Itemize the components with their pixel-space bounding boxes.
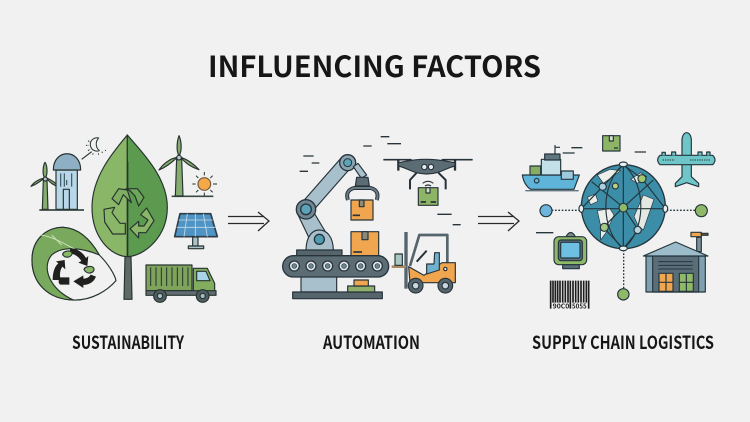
icon: silo tower xyxy=(53,152,92,209)
title: INFLUENCING FACTORS xyxy=(208,44,541,86)
icon: left wind turbine xyxy=(31,162,84,210)
arrow: sustainability to automation xyxy=(228,212,269,231)
icon: box on conveyor xyxy=(351,232,379,256)
icon: leaf badge with recycle symbol xyxy=(32,227,116,300)
panel: sustainability xyxy=(31,135,217,302)
icon: drone package xyxy=(418,188,438,205)
icon: globe xyxy=(579,162,668,251)
icon: barcode xyxy=(550,281,589,310)
icon: large leaf with recycle symbol xyxy=(92,135,167,299)
icon: cargo ship xyxy=(522,145,579,191)
icon: barcode: 5055 xyxy=(572,301,587,310)
panel: supply chain logistics xyxy=(522,133,715,310)
icon: parcel xyxy=(603,136,620,151)
icon: barcode: 90C0 xyxy=(553,301,570,310)
icon: gripped box xyxy=(351,200,373,220)
arrow: automation to supply chain logistics xyxy=(478,212,519,231)
icon: sun xyxy=(192,172,217,196)
icon: robotic arm xyxy=(296,155,378,251)
icon: right wind turbine xyxy=(159,136,213,196)
icon: network nodes xyxy=(540,205,707,300)
icon: tracking device xyxy=(554,232,587,269)
icon: forklift xyxy=(392,232,455,293)
icon: conveyor belt xyxy=(283,250,389,299)
panel: automation xyxy=(283,137,473,299)
icon: solar panel xyxy=(175,214,217,249)
icon: warehouse xyxy=(643,232,708,292)
label: automation: AUTOMATION xyxy=(322,329,420,355)
motion dashes xyxy=(300,137,461,225)
label: sustainability: SUSTAINABILITY xyxy=(72,329,184,355)
motion dashes xyxy=(536,148,646,233)
icon: moon and sun rays xyxy=(86,138,106,155)
icon: recycling truck xyxy=(146,265,216,302)
icon: airplane xyxy=(658,133,715,187)
icon: drone xyxy=(383,159,473,189)
